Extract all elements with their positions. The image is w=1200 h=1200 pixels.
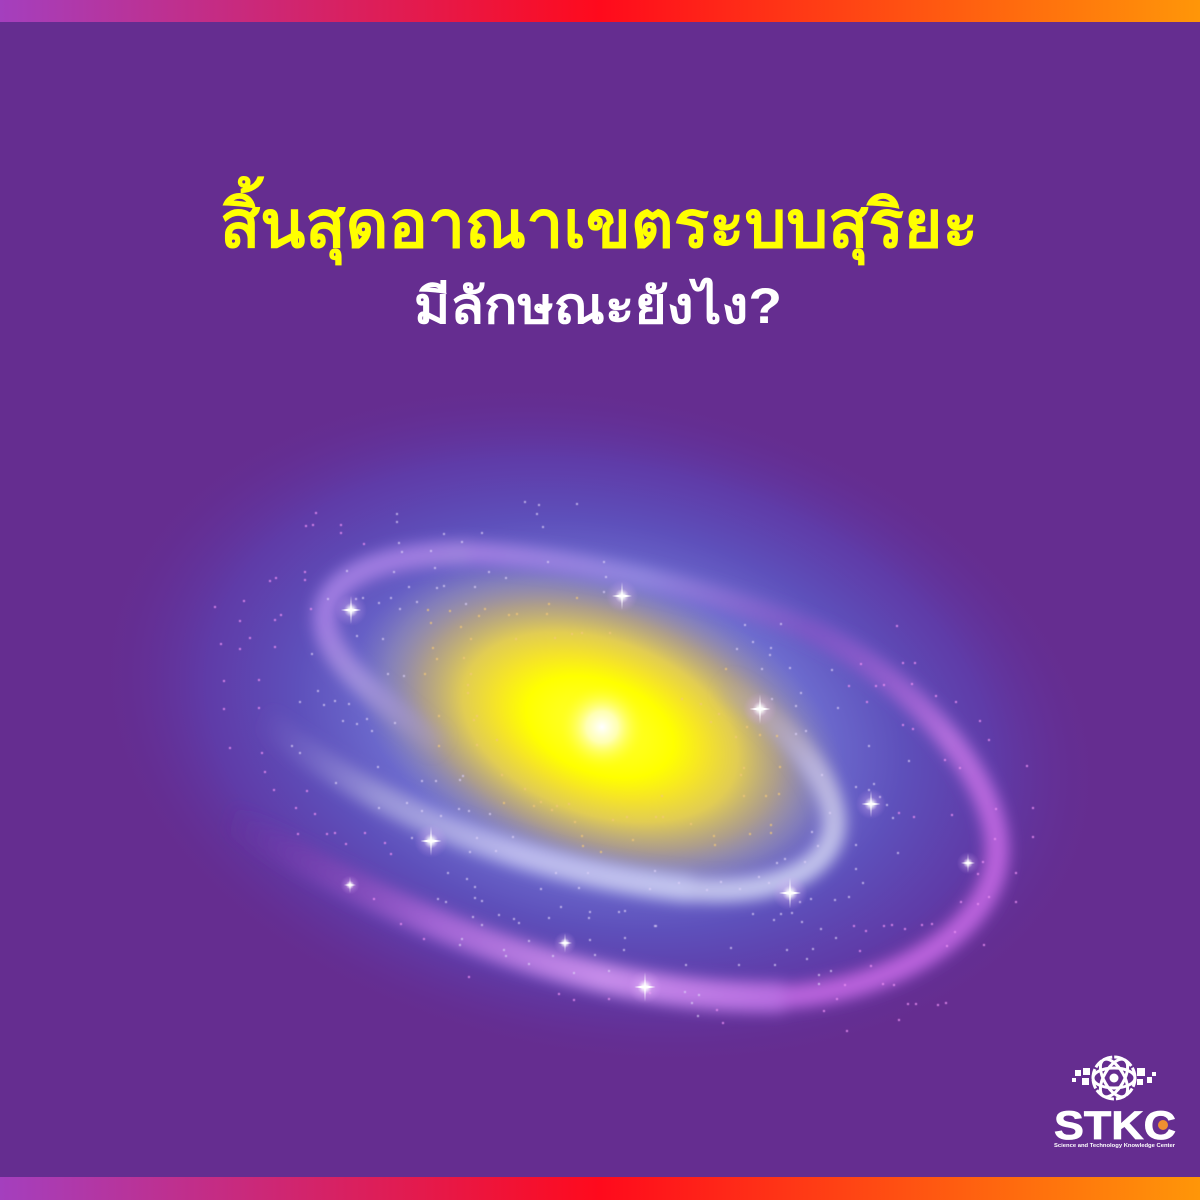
blue galaxy disc	[35, 299, 1165, 1151]
star dust gold	[425, 598, 780, 852]
galaxy illustration	[35, 299, 1165, 1151]
star dust light	[292, 502, 909, 1016]
outer arm	[225, 553, 997, 997]
white core highlight	[557, 682, 647, 772]
title	[220, 175, 978, 334]
star dust pink	[215, 513, 1033, 1031]
logo orange dot	[1158, 1120, 1168, 1130]
title line 1: สิ้นสุดอาณาเขตระบบสุริยะ	[220, 175, 978, 266]
STKC logo	[1054, 1055, 1176, 1149]
logo wordmark: STKC	[1054, 1104, 1176, 1148]
top gradient bar	[0, 0, 1200, 22]
logo tagline: Science and Technology Knowledge Center	[1054, 1143, 1176, 1149]
logo pixel squares	[1072, 1068, 1156, 1085]
spiral arms	[225, 553, 997, 997]
sparkle stars	[335, 580, 979, 1004]
bottom gradient bar	[0, 1177, 1200, 1200]
logo icon: atom	[1093, 1055, 1135, 1101]
yellow galactic core	[307, 494, 893, 960]
title line 2: มีลักษณะยังไง?	[414, 277, 782, 334]
inner arm	[262, 685, 834, 890]
